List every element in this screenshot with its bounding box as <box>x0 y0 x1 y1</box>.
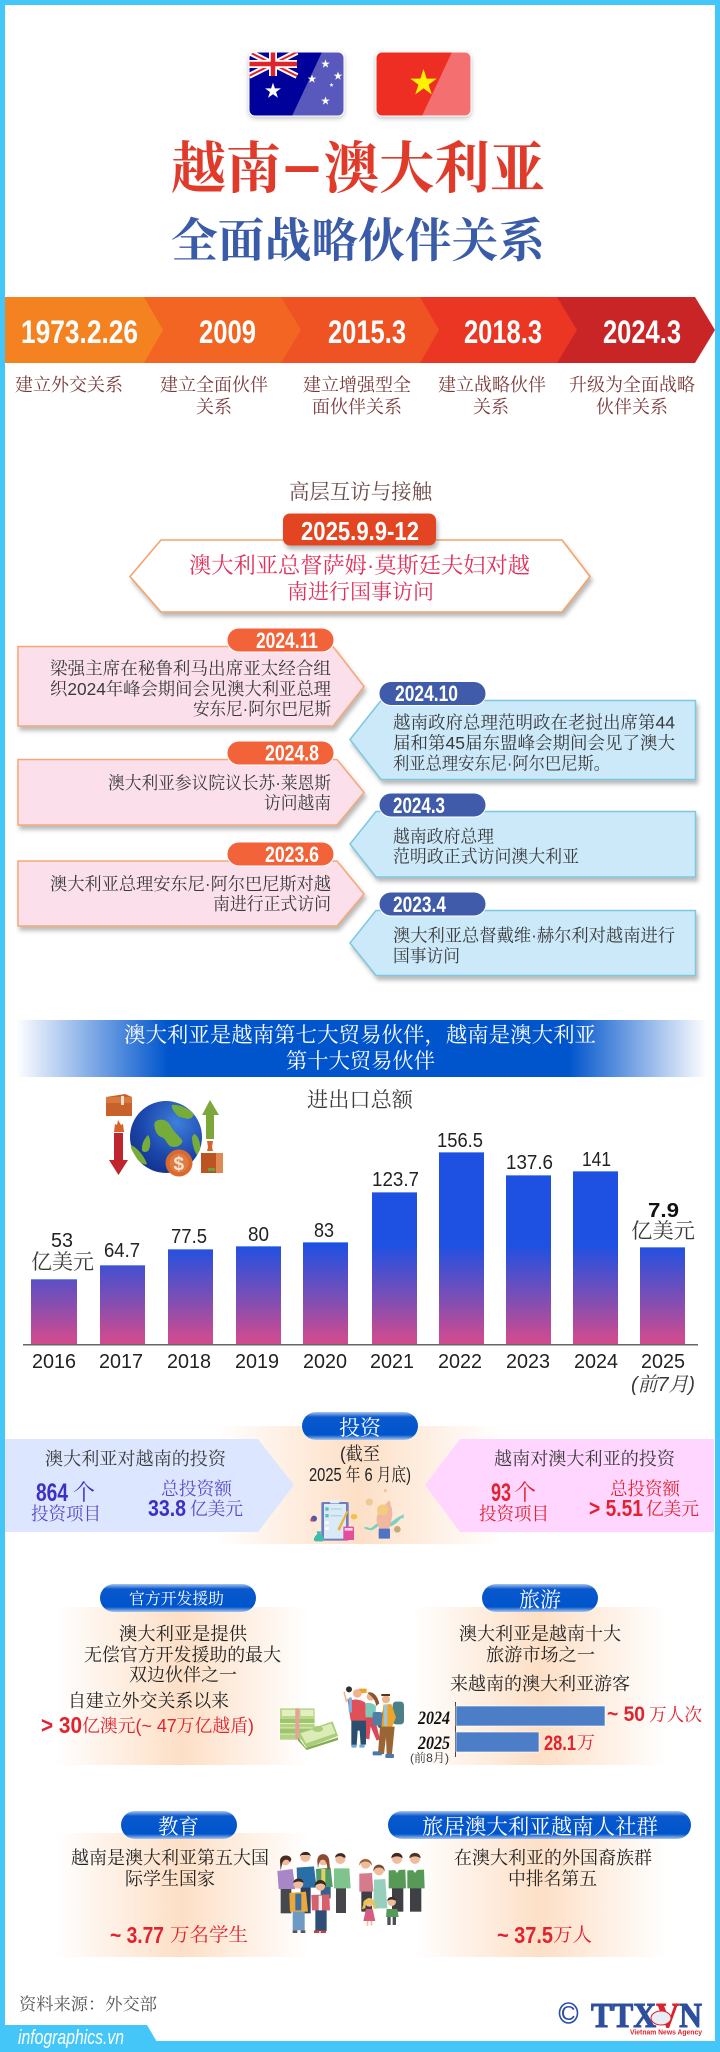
panel: 2023.6: 2023.6 <box>265 842 319 867</box>
panel: Vietnam investment in Australia: 总投资额 <box>610 1478 681 1499</box>
panel: 2024.3: 范明政正式访问澳大利亚 <box>393 846 579 866</box>
logo: TTXVN: TTXVN <box>591 1996 702 2035</box>
banner: trade partner <box>16 1020 707 1077</box>
bar chart: import-export totals: 2024 <box>574 1351 618 1373</box>
panel: Vietnamese community in Australia: ~ 37.5 <box>497 1922 553 1948</box>
icon: globe trade: $ <box>174 1154 184 1175</box>
timeline: 升级为全面战略 <box>569 375 695 395</box>
panel: Australia investment in Vietnam: 个 <box>73 1480 95 1505</box>
bar chart: import-export totals: 2019 <box>235 1351 279 1373</box>
panel: education: 万名学生 <box>170 1924 248 1946</box>
logo: TTXVN: Vietnam News Agency <box>630 2030 702 2036</box>
bar chart: import-export totals: 2016 <box>32 1351 76 1373</box>
panel: Vietnam investment in Australia: > 5.51 <box>589 1495 643 1521</box>
timeline: 1973.2.26 <box>21 314 138 350</box>
panel: tourism <box>410 1584 702 1765</box>
panel: state visit 2025: 2025.9.9-12 <box>301 516 419 546</box>
bar chart: import-export totals: 137.6 <box>506 1152 553 1174</box>
timeline: 2024.3 <box>603 314 681 350</box>
panel: Vietnamese community in Australia: 在澳大利亚的外国裔族群 <box>454 1848 652 1868</box>
investment date note: 2025 年 6 月底) <box>309 1464 411 1485</box>
bar chart: import-export totals: 亿美元 <box>631 1220 695 1243</box>
title <box>171 133 546 268</box>
panel: state visit 2025 <box>130 514 590 612</box>
panel: Australia investment in Vietnam: 864 <box>36 1479 68 1507</box>
panel: 2024.8: 访问越南 <box>264 793 331 813</box>
panel: 2024.10: 利亚总理安东尼·阿尔巴尼斯。 <box>393 754 610 774</box>
bar chart: import-export totals: (前7月) <box>631 1374 695 1396</box>
panel: Vietnamese community in Australia: 万人 <box>553 1924 592 1946</box>
panel: Vietnamese community in Australia: 旅居澳大利亚越南人社群 <box>422 1816 658 1839</box>
panel: official development assistance: > 30 <box>41 1712 82 1738</box>
panel: Australia investment in Vietnam: 33.8 <box>148 1495 186 1521</box>
bar chart: tourists: 28.1 <box>544 1732 576 1755</box>
chart title: 进出口总额 <box>307 1089 414 1112</box>
panel: investment <box>5 1412 714 1544</box>
panel: 2024.10: 届和第45届东盟峰会期间会见了澳大 <box>393 733 675 753</box>
panel: tourism: 旅游 <box>519 1589 561 1612</box>
title: 越南 <box>171 139 281 201</box>
panel: education: 越南是澳大利亚第五大国 <box>71 1847 269 1868</box>
banner: trade partner: 第十大贸易伙伴 <box>286 1050 435 1073</box>
panel: Vietnam investment in Australia: 投资项目 <box>479 1503 549 1524</box>
panel: official development assistance: 亿澳元(~ 47万亿越盾) <box>82 1716 254 1736</box>
timeline: 建立外交关系 <box>15 375 123 395</box>
bar chart: tourists: (前8月) <box>410 1751 449 1765</box>
panel: Australia investment in Vietnam: 投资项目 <box>31 1503 101 1524</box>
bar chart: tourists: 万人次 <box>649 1705 702 1725</box>
panel: Vietnam investment in Australia: 越南对澳大利亚的投资 <box>494 1448 676 1469</box>
bar chart: import-export totals: 亿美元 <box>31 1251 94 1274</box>
icon: group of students <box>277 1852 351 1933</box>
bar chart: import-export totals: 77.5 <box>171 1226 207 1248</box>
heading: investment: 投资 <box>339 1417 382 1440</box>
panel: state visit 2025: 澳大利亚总督萨姆·莫斯廷夫妇对越 <box>189 553 530 578</box>
panel: 2024.3: 2024.3 <box>393 793 445 818</box>
panel: Vietnamese community in Australia: 中排名第五 <box>508 1869 597 1889</box>
panel: 2024.10 <box>350 681 696 780</box>
bar chart: import-export totals: 156.5 <box>437 1130 483 1152</box>
panel: 2024.11: 2024.11 <box>256 628 318 653</box>
footer tab: infographics.vn: infographics.vn <box>18 2027 124 2049</box>
panel: 2024.11: 梁强主席在秘鲁利马出席亚太经合组 <box>50 658 332 678</box>
panel: official development assistance <box>41 1584 308 1765</box>
panel: 2023.4: 国事访问 <box>393 946 460 966</box>
bar chart: import-export totals: 64.7 <box>104 1240 140 1262</box>
panel: education <box>55 1811 308 1957</box>
icon: family group <box>359 1853 425 1926</box>
panel: official development assistance: 澳大利亚是提供 <box>119 1624 248 1644</box>
panel: education: 际学生国家 <box>125 1869 215 1889</box>
panel: official development assistance: 官方开发援助 <box>129 1590 224 1608</box>
panel: Vietnam investment in Australia <box>425 1439 714 1532</box>
icon: investment clipboard and hand <box>310 1489 404 1541</box>
investment date note <box>309 1444 411 1485</box>
bar chart: tourists: ~ 50 <box>607 1703 645 1726</box>
panel: 2024.3: 越南政府总理 <box>393 826 494 846</box>
logo: TTXVN: C <box>561 2003 575 2025</box>
panel: Vietnam investment in Australia: 个 <box>514 1480 536 1505</box>
timeline: 2015.3 <box>328 314 406 350</box>
bar chart: import-export totals: 2017 <box>99 1351 143 1373</box>
bar chart: import-export totals: 2018 <box>167 1351 211 1373</box>
flag: Australia <box>249 52 344 116</box>
bar chart: import-export totals: 2020 <box>303 1351 347 1373</box>
panel: Australia investment in Vietnam: 总投资额 <box>161 1478 233 1499</box>
panel: education: 教育 <box>158 1816 199 1839</box>
icon: tourists <box>343 1686 404 1758</box>
panel: 2024.11: 织2024年峰会期间会见澳大利亚总理 <box>50 679 331 699</box>
panel: 2024.10: 越南政府总理范明政在老挝出席第44 <box>393 712 675 732</box>
title: 澳大利亚 <box>324 139 545 201</box>
investment date note: (截至 <box>340 1444 380 1464</box>
text: source: 资料来源：外交部 <box>19 1995 157 2014</box>
title: 全面战略伙伴关系 <box>171 216 546 268</box>
bar chart: import-export totals: 2022 <box>438 1351 482 1373</box>
panel: 2023.4 <box>350 892 696 976</box>
timeline: 建立战略伙伴 <box>438 375 546 395</box>
panel: tourism: 澳大利亚是越南十大 <box>459 1623 621 1644</box>
bar chart: import-export totals: 2025 <box>641 1351 685 1373</box>
bar chart: tourists: 2025 <box>417 1733 450 1754</box>
timeline <box>5 297 715 417</box>
bar chart: tourists <box>410 1702 702 1765</box>
bar chart: import-export totals <box>23 1130 698 1396</box>
bar chart: import-export totals: 2021 <box>370 1351 414 1373</box>
timeline: 面伙伴关系 <box>312 397 402 417</box>
flag: Vietnam <box>376 52 471 116</box>
timeline: 关系 <box>473 397 509 417</box>
panel: 2024.11: 安东尼·阿尔巴尼斯 <box>193 699 331 719</box>
panel: tourism: 旅游市场之一 <box>486 1645 595 1665</box>
bar chart: import-export totals: 141 <box>582 1149 611 1171</box>
panel: official development assistance: 双边伙伴之一 <box>129 1665 237 1685</box>
timeline: 建立全面伙伴 <box>160 375 268 395</box>
icon: banknotes <box>280 1708 338 1750</box>
bar chart: import-export totals: 7.9 <box>648 1200 679 1222</box>
bar chart: import-export totals: 83 <box>314 1220 334 1242</box>
bar chart: import-export totals: 80 <box>248 1224 269 1246</box>
panel: official development assistance: 自建立外交关系以来 <box>68 1691 229 1711</box>
banner: trade partner: 澳大利亚是越南第七大贸易伙伴，越南是澳大利亚 <box>124 1024 596 1048</box>
panel: tourism: 来越南的澳大利亚游客 <box>450 1673 630 1694</box>
panel: 2024.8: 澳大利亚参议院议长苏·莱恩斯 <box>108 773 331 793</box>
panel: Vietnam investment in Australia: 亿美元 <box>646 1499 699 1519</box>
panel: 2024.10: 2024.10 <box>395 681 458 706</box>
panel: Vietnamese community in Australia <box>388 1811 691 1957</box>
bar chart: tourists: 2024 <box>417 1708 450 1729</box>
panel: 2024.11 <box>18 628 364 726</box>
timeline: 伙伴关系 <box>596 397 668 417</box>
panel: 2023.6 <box>18 842 364 926</box>
bar chart: import-export totals: 123.7 <box>372 1169 419 1191</box>
panel: Vietnam investment in Australia: 93 <box>491 1479 511 1507</box>
bar chart: import-export totals: 53 <box>51 1230 73 1252</box>
panel: state visit 2025: 南进行国事访问 <box>287 581 434 604</box>
panel: 2023.6: 澳大利亚总理安东尼·阿尔巴尼斯对越 <box>50 874 331 894</box>
panel: 2023.4: 2023.4 <box>393 892 447 917</box>
panel: Australia investment in Vietnam: 澳大利亚对越南的投资 <box>45 1448 227 1469</box>
timeline: 建立增强型全 <box>303 375 411 395</box>
timeline: 2018.3 <box>464 314 542 350</box>
title: – <box>286 133 318 195</box>
heading: high-level visits: 高层互访与接触 <box>289 481 433 504</box>
panel: 2023.4: 澳大利亚总督戴维·赫尔利对越南进行 <box>393 926 675 946</box>
panel: Australia investment in Vietnam: 亿美元 <box>190 1499 243 1519</box>
panel: education: ~ 3.77 <box>110 1922 164 1948</box>
bar chart: import-export totals: 2023 <box>506 1351 550 1373</box>
panel: 2024.8 <box>18 740 364 825</box>
panel: official development assistance: 无偿官方开发援助的最大 <box>84 1645 281 1665</box>
bar chart: tourists: 万 <box>577 1733 595 1753</box>
icon: globe trade <box>106 1094 223 1176</box>
panel: 2023.6: 南进行正式访问 <box>213 894 331 914</box>
timeline: 2009 <box>199 314 256 350</box>
panel: 2024.3 <box>350 793 696 877</box>
panel: Australia investment in Vietnam <box>5 1439 294 1532</box>
heading: investment <box>302 1412 418 1440</box>
panel: 2024.8: 2024.8 <box>265 740 319 766</box>
timeline: 关系 <box>196 397 232 417</box>
